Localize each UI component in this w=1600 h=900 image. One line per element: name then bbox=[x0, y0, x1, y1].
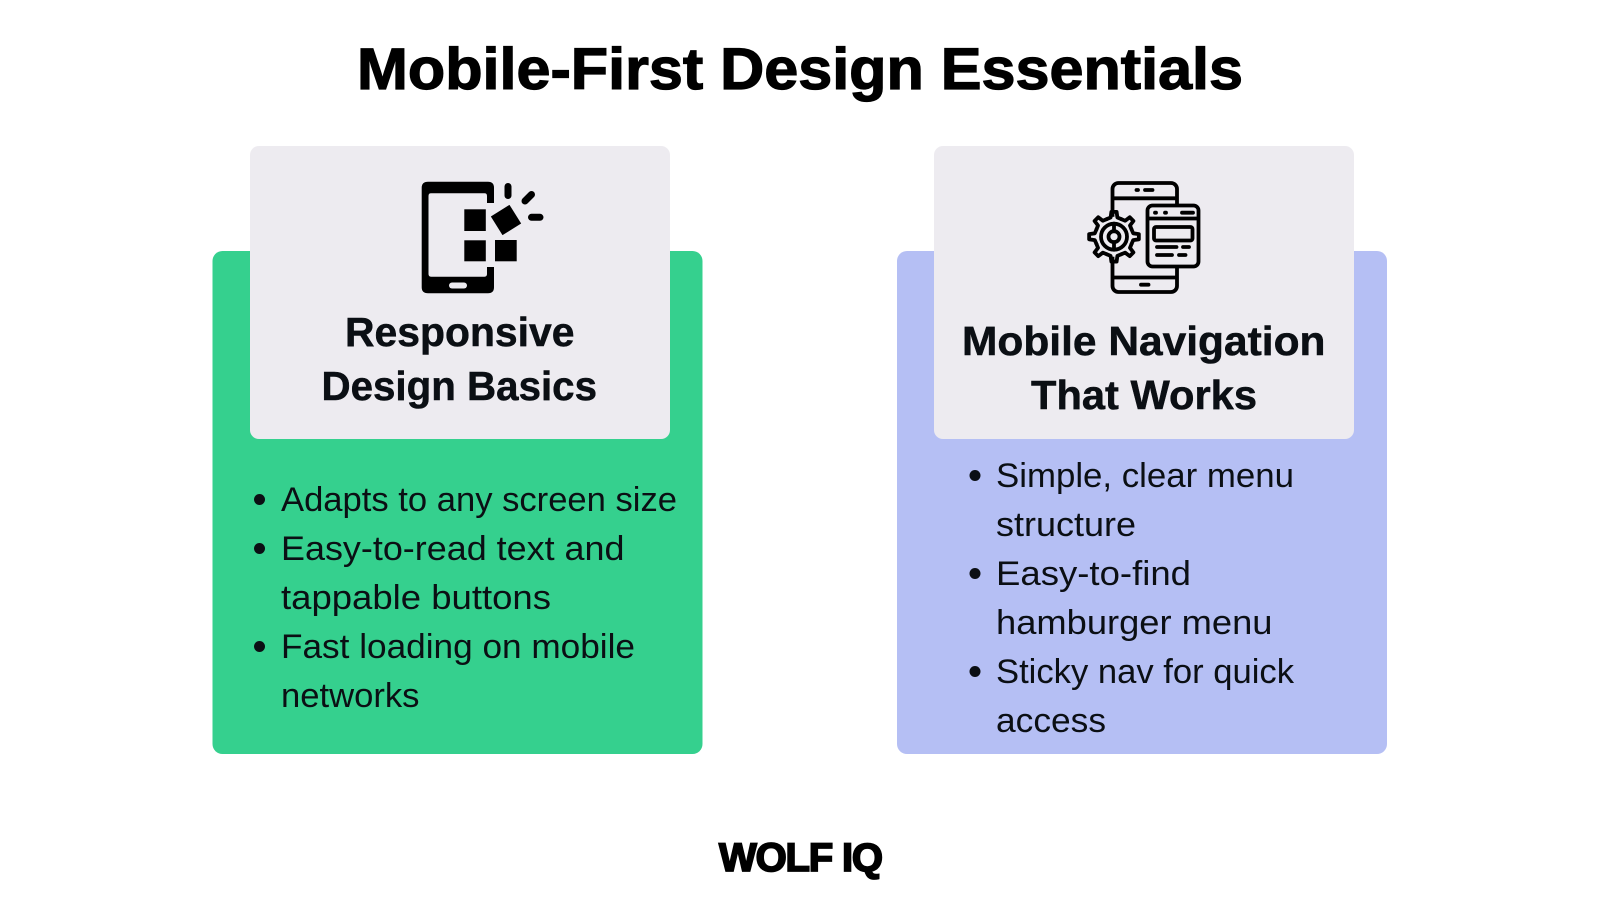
heading: mobile navigation that works bbox=[962, 318, 1326, 418]
heading: responsive design basics bbox=[322, 309, 597, 409]
header card: responsive design bbox=[250, 146, 670, 439]
heading: mobile navigation that works: That Works bbox=[1031, 372, 1257, 418]
bullet list: responsive: Easy-to-read text and bbox=[281, 530, 624, 568]
bullet list: navigation: Easy-to-find bbox=[996, 555, 1191, 593]
bullet list: responsive: tappable buttons bbox=[281, 579, 551, 617]
bullet list: navigation: hamburger menu bbox=[996, 604, 1272, 642]
bullet list: navigation: Simple, clear menu bbox=[996, 457, 1294, 495]
title: Mobile-First Design Essentials bbox=[357, 37, 1243, 102]
bullet list: responsive: Adapts to any screen size bbox=[281, 481, 677, 519]
heading: responsive design basics: Responsive bbox=[345, 309, 574, 355]
bullet list: responsive: networks bbox=[281, 677, 420, 715]
bullet list: navigation: Sticky nav for quick bbox=[996, 653, 1295, 691]
panel: mobile navigation bbox=[897, 146, 1387, 754]
bullet list: responsive bbox=[254, 481, 677, 715]
heading: mobile navigation that works: Mobile Navigation bbox=[962, 318, 1326, 364]
bullet list: responsive: Fast loading on mobile bbox=[281, 628, 635, 666]
logo: WOLF IQ: WOLF IQ bbox=[719, 836, 883, 880]
panel background: green bbox=[212, 251, 702, 754]
heading: responsive design basics: Design Basics bbox=[322, 363, 597, 409]
panel: responsive design basics bbox=[212, 146, 702, 754]
panel background: periwinkle bbox=[897, 251, 1387, 754]
icon: phone with blocks bbox=[422, 182, 540, 293]
bullet list: navigation: structure bbox=[996, 506, 1136, 544]
bullet list: navigation: access bbox=[996, 702, 1106, 740]
bullet list: navigation bbox=[970, 457, 1295, 740]
icon: phone with gear and browser window bbox=[1089, 183, 1198, 292]
header card: mobile navigation bbox=[934, 146, 1354, 439]
